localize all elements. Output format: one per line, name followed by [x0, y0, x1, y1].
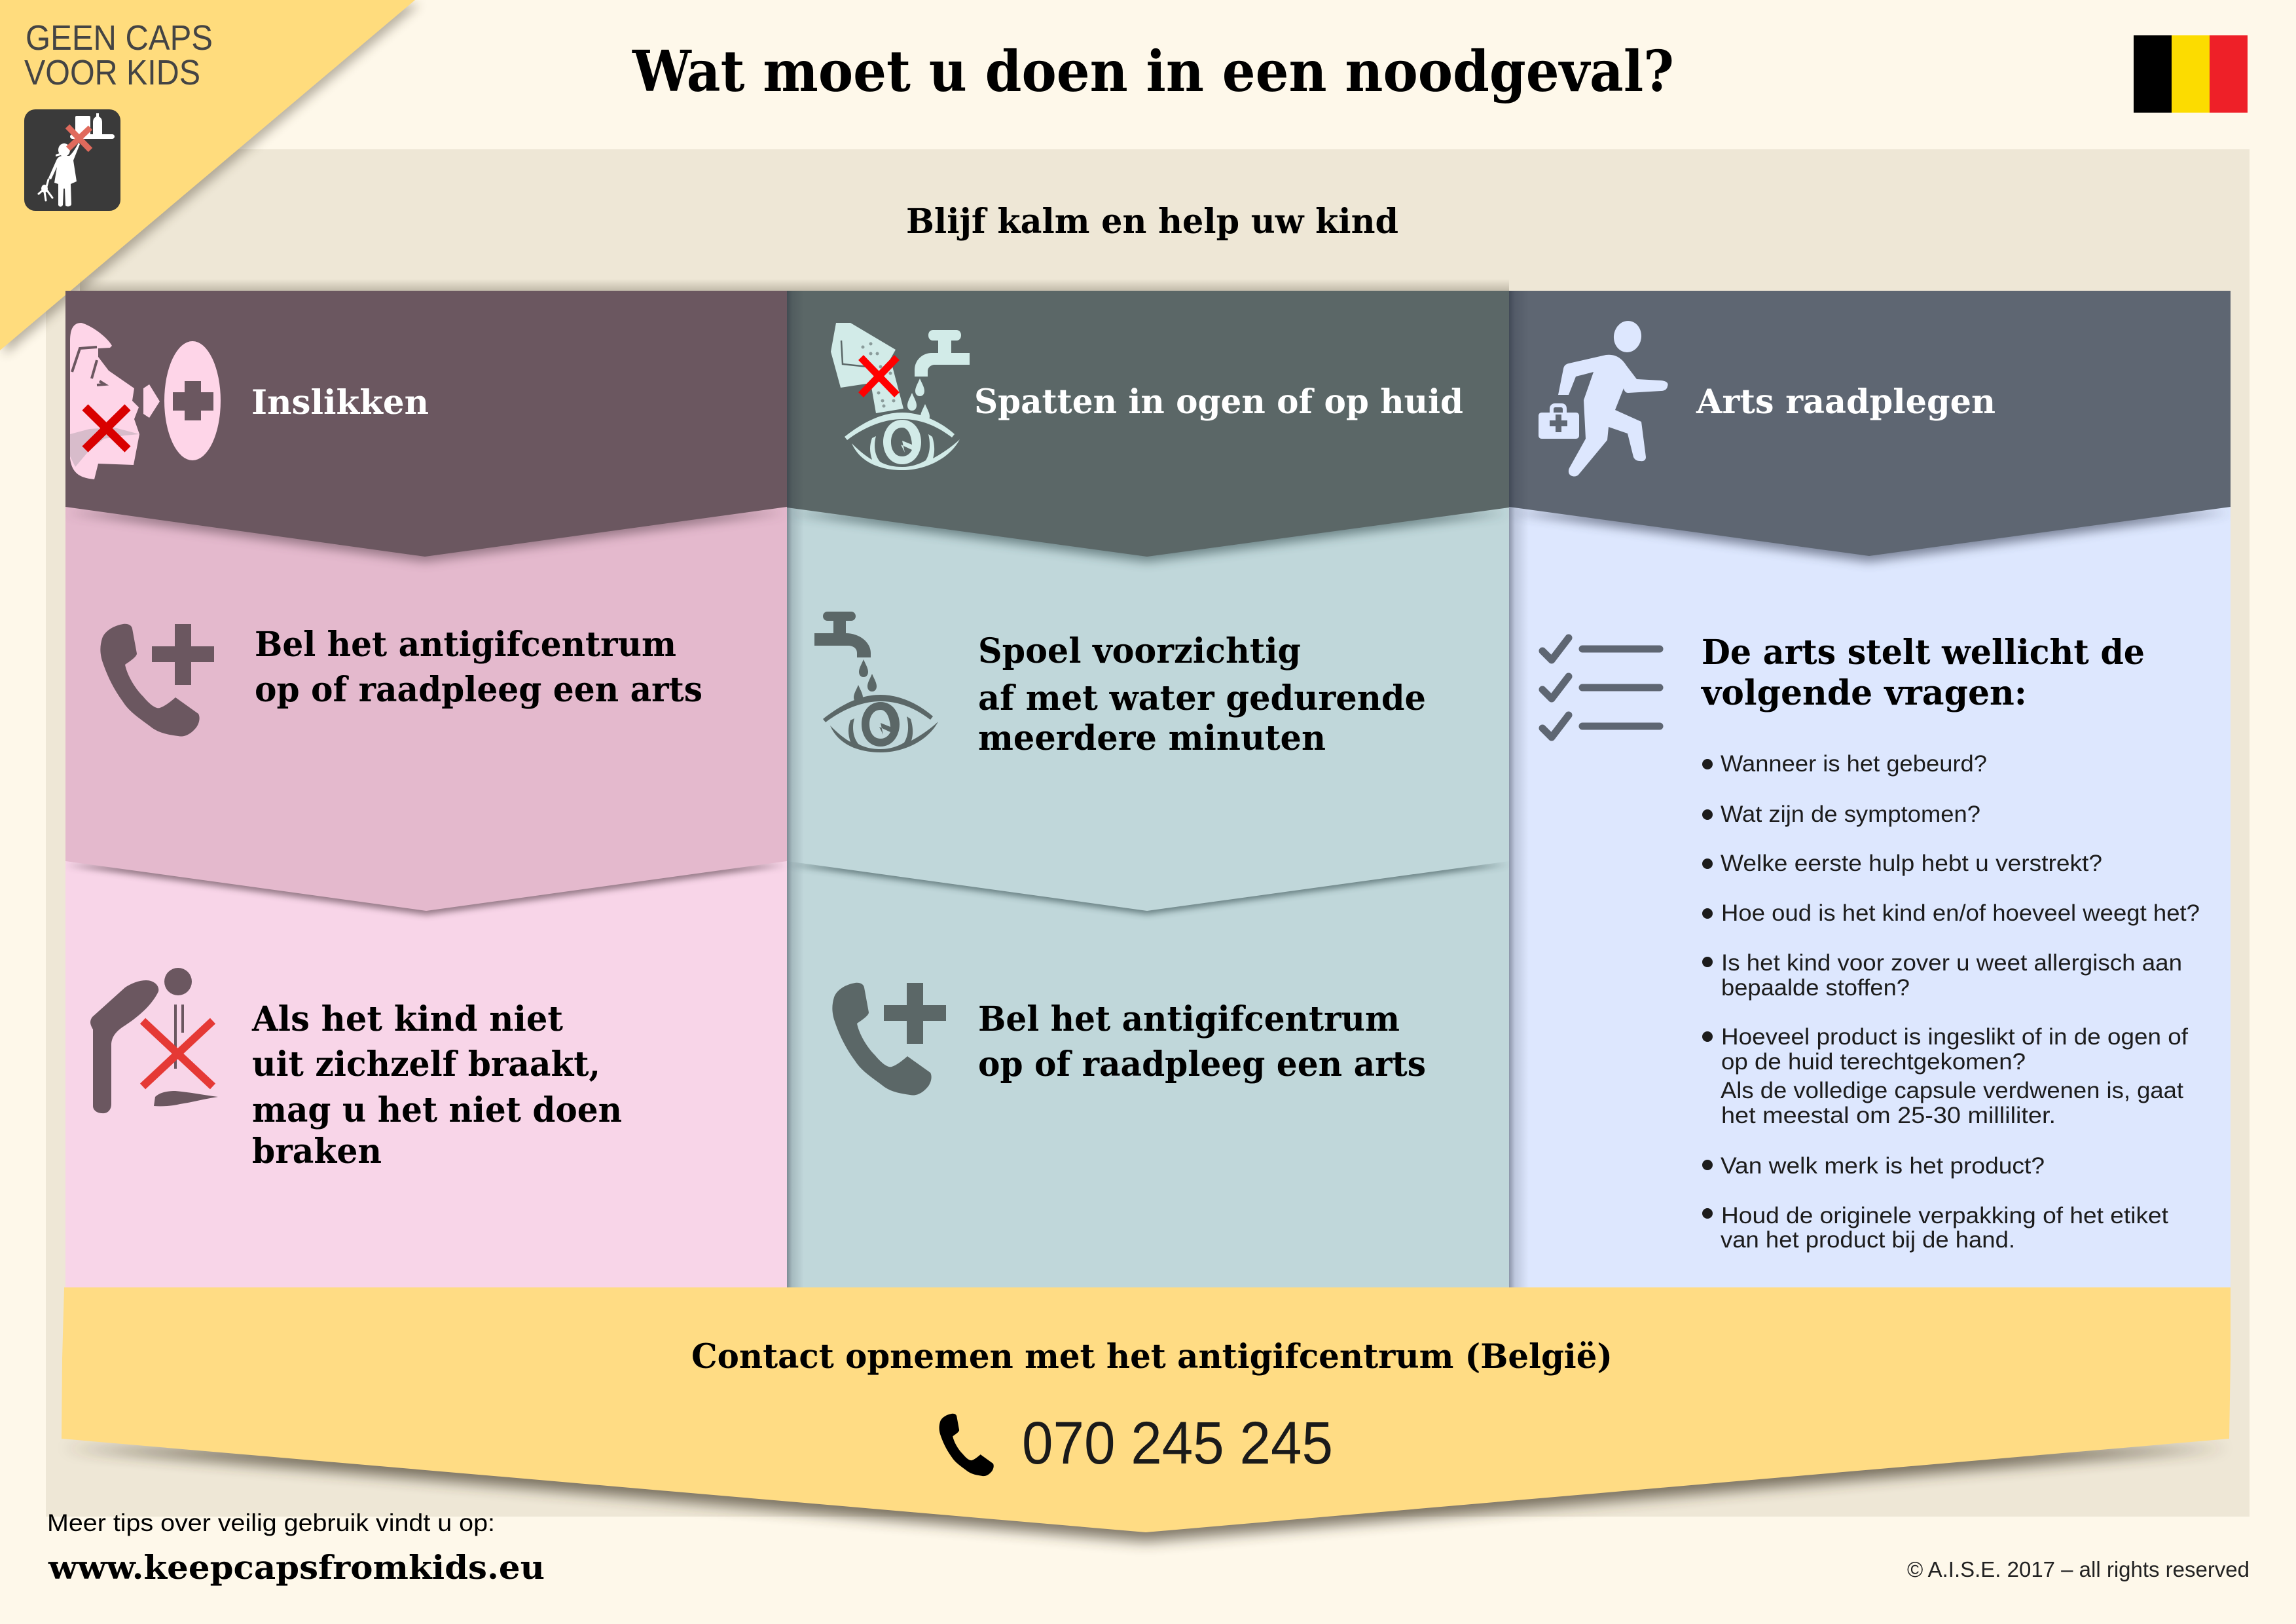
icon: checklist — [1542, 638, 1660, 737]
question list: het meestal om 25-30 milliliter. — [1721, 1103, 2056, 1128]
instruction: rinse: Spoel voorzichtig — [978, 631, 1301, 671]
brand name: VOOR KIDS — [24, 53, 200, 92]
icon: tap rinsing eye — [814, 612, 938, 752]
panel: eyes and skin column — [787, 291, 1509, 1287]
instruction: rinse — [978, 631, 1426, 758]
icon: phone — [939, 1414, 994, 1476]
brand name: GEEN CAPS — [26, 18, 213, 58]
lower chevron band — [787, 786, 1509, 911]
question list: Wanneer is het gebeurd? — [1721, 751, 1987, 777]
header band: Inslikken — [65, 291, 787, 557]
icon: child reaching for shelf — [24, 109, 120, 211]
lower chevron band — [65, 786, 787, 911]
instruction: call: op of raadpleeg een arts — [978, 1044, 1426, 1084]
instruction: call — [255, 625, 702, 710]
question list: Is het kind voor zover u weet allergisch aan — [1721, 950, 2182, 976]
column heading: Arts raadplegen — [1696, 382, 1995, 422]
phone number: 070 245 245 — [1022, 1410, 1333, 1477]
instruction: do not induce vomiting: braken — [252, 1132, 382, 1172]
column heading: Spatten in ogen of op huid — [974, 382, 1463, 422]
header band: Spatten in ogen of op huid — [787, 291, 1509, 557]
instruction: do not induce vomiting — [251, 999, 622, 1172]
icon: running person with first aid kit — [1539, 319, 1668, 477]
instruction: do not induce vomiting: mag u het niet doen — [252, 1090, 622, 1130]
title: Wat moet u doen in een noodgeval? — [632, 39, 1674, 105]
icon: splash bottle, tap and eye — [831, 323, 970, 470]
doctor questions heading: volgende vragen: — [1701, 673, 2027, 713]
instruction: do not induce vomiting: Als het kind niet — [251, 999, 563, 1039]
panel: contact banner — [62, 1287, 2231, 1532]
question list: Van welk merk is het product? — [1721, 1153, 2045, 1179]
icon: face and first aid — [70, 323, 221, 479]
instruction: call: op of raadpleeg een arts — [255, 670, 702, 710]
question list: Als de volledige capsule verdwenen is, gaat — [1721, 1078, 2183, 1103]
instruction: rinse: af met water gedurende — [978, 678, 1426, 718]
corner triangle — [0, 0, 415, 350]
question list: Welke eerste hulp hebt u verstrekt? — [1721, 851, 2102, 876]
corner triangle shadow — [5, 5, 420, 355]
column heading: Inslikken — [251, 383, 429, 422]
panel: swallowing column — [65, 291, 787, 1287]
header shadow on top edge — [80, 279, 1509, 291]
icon: phone with plus — [832, 983, 946, 1096]
header band: Arts raadplegen — [1509, 291, 2231, 556]
question list — [1702, 751, 2200, 1253]
subtitle: Blijf kalm en help uw kind — [906, 202, 1398, 242]
question list: Wat zijn de symptomen? — [1721, 802, 1980, 827]
brand name — [24, 18, 213, 92]
instruction: call: Bel het antigifcentrum — [978, 999, 1400, 1039]
icon: Belgian flag — [2134, 35, 2248, 113]
question list: Houd de originele verpakking of het etiket — [1721, 1203, 2168, 1228]
question list: bepaalde stoffen? — [1721, 975, 1910, 1001]
icon: do not induce vomiting — [90, 968, 218, 1113]
icon: phone with plus — [100, 624, 214, 737]
question list: van het product bij de hand. — [1721, 1227, 2015, 1253]
footer tips text: Meer tips over veilig gebruik vindt u op: — [47, 1509, 495, 1536]
instruction: rinse: meerdere minuten — [978, 718, 1326, 758]
question list: Hoeveel product is ingeslikt of in de ogen of — [1721, 1024, 2188, 1050]
instruction: do not induce vomiting: uit zichzelf braakt, — [252, 1044, 600, 1084]
footer website: www.keepcapsfromkids.eu — [48, 1548, 545, 1587]
panel: doctor column — [1509, 291, 2231, 1287]
question list: op de huid terechtgekomen? — [1721, 1049, 2026, 1075]
instruction: call: Bel het antigifcentrum — [255, 625, 676, 665]
copyright: © A.I.S.E. 2017 – all rights reserved — [1907, 1557, 2250, 1581]
doctor questions heading — [1701, 633, 2145, 713]
contact heading: Contact opnemen met het antigifcentrum (België) — [691, 1337, 1613, 1376]
contact banner shadow — [62, 1448, 2229, 1541]
doctor questions heading: De arts stelt wellicht de — [1702, 633, 2145, 673]
column side shadows — [787, 291, 1529, 1287]
question list: Hoe oud is het kind en/of hoeveel weegt het? — [1721, 900, 2200, 926]
instruction: call — [978, 999, 1426, 1084]
